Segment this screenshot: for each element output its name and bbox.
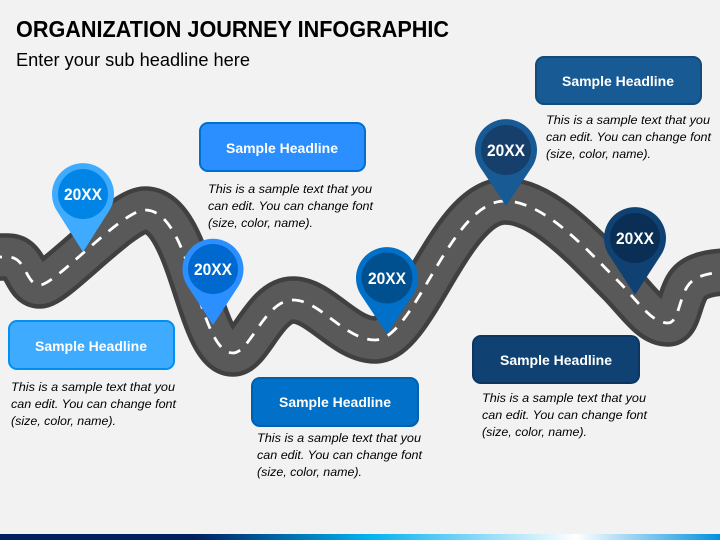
panel: milestone 5 [536,57,712,161]
headline box 1 [9,321,174,369]
headline box 5: Sample Headline [562,73,674,89]
body text 2: This is a sample text that you [208,184,373,196]
body text 5: (size, color, name). [546,149,651,161]
body text 3: can edit. You can change font [257,450,423,462]
body text 1 [11,382,177,428]
body text 3: (size, color, name). [257,467,362,479]
headline box 3 [252,378,418,426]
subtitle: Enter your sub headline here [16,50,250,70]
pin marker 1: 20XX [64,185,103,204]
body text 2: (size, color, name). [208,218,313,230]
body text 2: can edit. You can change font [208,201,374,213]
body text 4: (size, color, name). [482,427,587,439]
pin marker 3: 20XX [368,269,407,288]
body text 3 [257,433,423,479]
panel: milestone 1 [9,321,177,428]
pin marker 5 [604,207,666,295]
headline box 3: Sample Headline [279,394,391,410]
title: ORGANIZATION JOURNEY INFOGRAPHIC [16,16,449,42]
body text 4: can edit. You can change font [482,410,648,422]
headline box 2 [200,123,365,171]
headline box 1: Sample Headline [35,338,147,354]
headline box 2: Sample Headline [226,140,338,156]
panel: milestone 4 [473,336,648,439]
pin marker 4: 20XX [487,141,526,160]
bottom gradient bar [0,534,720,540]
body text 5: This is a sample text that you [546,115,711,127]
body text 5 [546,115,712,161]
pin marker 3 [356,247,418,334]
headline box 4 [473,336,639,383]
headline box 5 [536,57,701,104]
body text 5: can edit. You can change font [546,132,712,144]
body text 2 [208,184,374,230]
body text 1: This is a sample text that you [11,382,176,394]
pin marker 1 [52,163,114,252]
body text 4: This is a sample text that you [482,393,647,405]
winding road [0,201,720,353]
pin marker 5: 20XX [616,229,655,248]
panel: milestone 3 [252,378,423,479]
body text 3: This is a sample text that you [257,433,422,445]
headline box 4: Sample Headline [500,352,612,368]
body text 1: can edit. You can change font [11,399,177,411]
body text 1: (size, color, name). [11,416,116,428]
pin marker 2: 20XX [194,260,233,279]
pin marker 2 [182,239,244,325]
panel: milestone 2 [200,123,374,230]
pin marker 4 [475,119,537,206]
body text 4 [482,393,648,439]
